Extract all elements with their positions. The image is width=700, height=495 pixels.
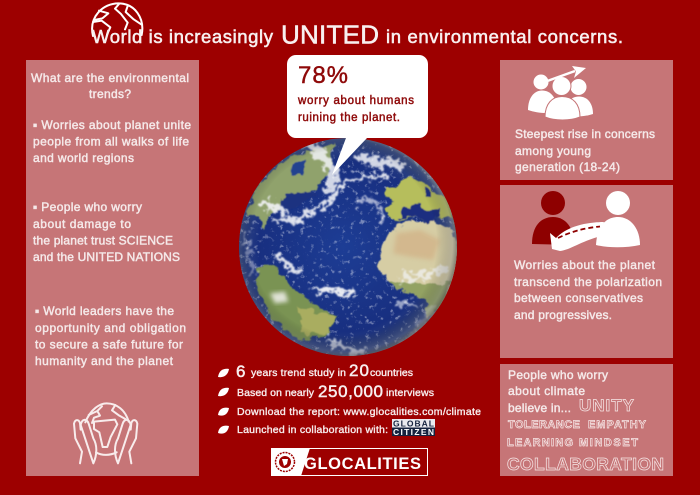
logo: Glocalities: [271, 448, 428, 476]
heading: trends: trends?: [89, 87, 131, 101]
title: in environmental concerns.: [386, 26, 623, 47]
panel: young generation: [500, 60, 673, 180]
text block: steepest rise: Steepest rise in concerns: [515, 127, 655, 141]
text block: steepest rise: generation (18-24): [515, 160, 620, 174]
text block: believe in: [508, 368, 608, 415]
word cloud: values: TOLERANCE: [508, 419, 580, 431]
heading: trends: [31, 71, 189, 101]
word cloud: values: LEARNING: [507, 437, 573, 449]
fact: trend study: 6: [236, 362, 245, 381]
text block: science and UN: [33, 200, 180, 264]
word cloud: values: UNITY: [579, 396, 635, 415]
Europe: [385, 175, 455, 224]
text block: world leaders: humanity and the planet: [35, 354, 174, 368]
callout: 78%: worry about humans: [297, 95, 414, 107]
callout: 78%: [287, 55, 428, 175]
panel: people who worry believe in: [500, 364, 673, 476]
fact: interviews: [237, 382, 434, 401]
text block: worries unite: ▪ Worries about planet unite: [33, 118, 191, 132]
text block: steepest rise: among young: [515, 144, 591, 158]
text block: world leaders: to secure a safe future for: [35, 338, 183, 352]
text block: science and UN: ▪ People who worry: [33, 200, 142, 214]
text block: believe in: believe in...: [508, 401, 571, 415]
North America: [247, 143, 333, 229]
panel: polarization: [500, 185, 673, 358]
text block: worries unite: people from all walks of life: [33, 134, 189, 148]
logo: Global Citizen: GLOBAL: [393, 418, 434, 428]
text block: polarization: transcend the polarization: [514, 275, 662, 289]
logo: Global Citizen: [392, 418, 435, 437]
fact: trend study: [236, 361, 413, 381]
text block: believe in: People who worry: [508, 368, 608, 382]
Africa: [378, 220, 460, 320]
icon: two people and a bridge: [532, 191, 640, 251]
fact: collaboration: Launched in collaboration with:: [237, 424, 388, 436]
text block: science and UN: about damage to: [33, 217, 131, 231]
fact: interviews: Based on nearly: [237, 387, 315, 399]
word cloud: values: COLLABORATION: [507, 454, 664, 474]
text block: world leaders: [35, 304, 186, 368]
text block: world leaders: opportunity and obligation: [35, 321, 186, 335]
logo: Global Citizen: CITIZEN: [393, 427, 434, 437]
ocean speckle: [239, 138, 457, 356]
word cloud: values: [507, 396, 664, 474]
icon: hands holding globe: [74, 403, 137, 463]
title: [92, 20, 623, 50]
South America: [256, 265, 337, 342]
fact: trend study: countries: [370, 367, 413, 379]
icon: people with rising arrow: [528, 66, 593, 120]
text block: science and UN: and the UNITED NATIONS: [33, 250, 180, 264]
callout: 78%: ruining the planet.: [298, 112, 400, 124]
text block: worries unite: [33, 118, 191, 165]
text block: polarization: and progressives.: [514, 308, 612, 322]
text block: science and UN: the planet trust SCIENCE: [33, 234, 173, 248]
word cloud: values: EMPATHY: [588, 419, 647, 431]
panel: environmental trends: [26, 60, 199, 476]
text block: polarization: between conservatives: [514, 291, 643, 305]
fact: interviews: interviews: [386, 387, 434, 399]
fact: trend study: years trend study in: [251, 367, 346, 379]
fact: interviews: 250,000: [318, 382, 383, 401]
logo: Glocalities: GLOCALITIES: [304, 455, 421, 473]
icon: leaf bullets: [218, 369, 229, 434]
globe photo illustration: [239, 138, 460, 356]
text block: world leaders: ▪ World leaders have the: [35, 304, 174, 318]
text block: believe in: about climate: [508, 384, 585, 398]
facts list: [218, 361, 481, 437]
text block: worries unite: and world regions: [33, 151, 134, 165]
title: World is increasingly: [92, 26, 274, 47]
icon: globe in title: [92, 3, 142, 36]
word cloud: values: MINDSET: [579, 437, 638, 449]
callout: 78%: 78%: [298, 62, 348, 89]
heading: trends: What are the environmental: [31, 71, 189, 85]
fact: trend study: 20: [349, 361, 369, 380]
fact: download: Download the report: www.glocalities.com/climate: [237, 406, 481, 418]
title: UNITED: [281, 20, 379, 50]
text block: steepest rise: [515, 127, 655, 174]
text block: polarization: Worries about the planet: [514, 258, 656, 272]
clouds: [246, 143, 443, 353]
text block: polarization: [514, 258, 662, 322]
